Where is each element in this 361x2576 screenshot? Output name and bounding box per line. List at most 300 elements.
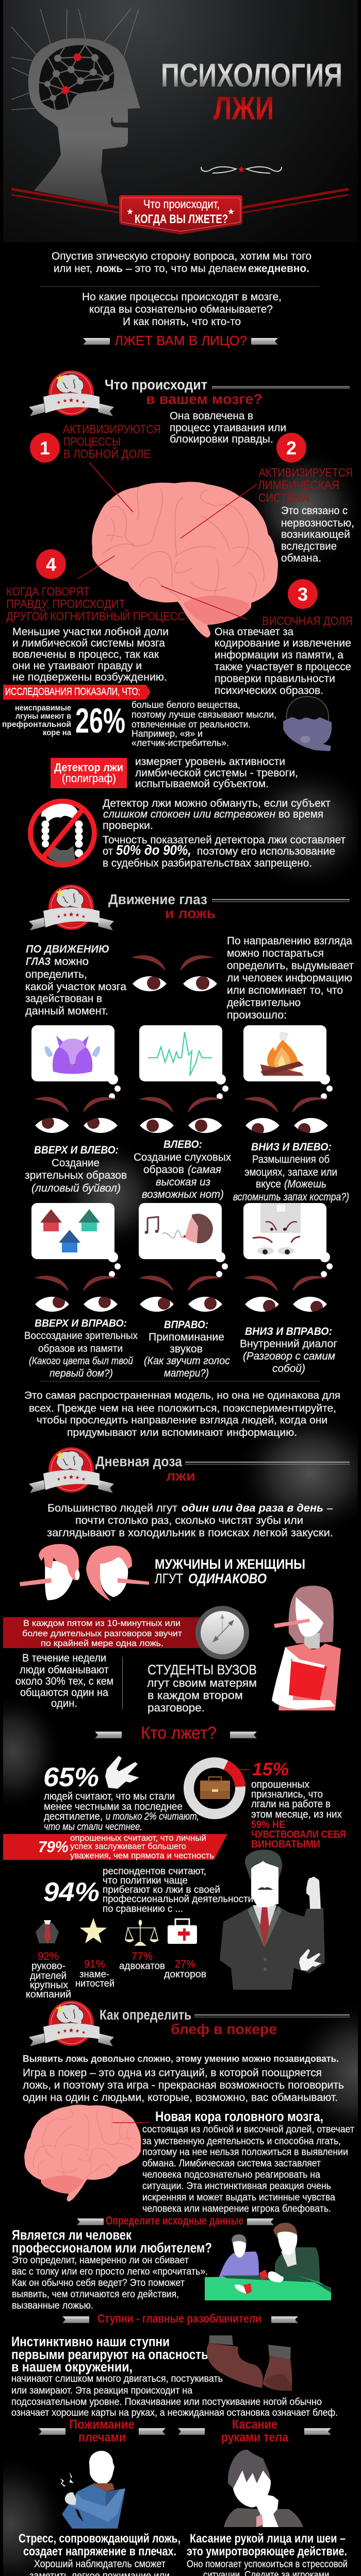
stat: 15 percent: ВИНОВАТЫМИ: [251, 1839, 320, 1850]
text: feet react first: начинают слишком много двигаться, постукивать: [11, 2374, 223, 2384]
text: shoulder stress: Хороший наблюдатель сможет: [34, 2558, 166, 2570]
polygraph box: Детектор лжи: [54, 761, 123, 774]
heading: touching body: руками тела: [221, 2430, 289, 2445]
text: deceiving the polygraph: Точность показателей детектора лжи составляет: [103, 834, 346, 846]
text: neocortex: Новая кора головного мозга,: [155, 2109, 323, 2124]
heading: feet are revealers: Ступни - главные разоблачители: [97, 2312, 261, 2325]
eyes: down right: [243, 1276, 327, 1313]
caption: down left: эмоциях, запахе или: [244, 1166, 337, 1178]
intro text: ежедневно.: [248, 263, 309, 275]
stat: 65 percent: десятилетие,: [44, 1811, 103, 1822]
text: gaze direction right: действительно: [227, 997, 301, 1009]
text: polygraph description: измеряет уровень активности: [135, 756, 285, 768]
heading: touching body: Касание: [232, 2417, 277, 2432]
stat: 15 percent: ЧУВСТВОВАЛИ СЕБЯ: [251, 1829, 346, 1840]
text: neocortex: за умственную деятельность и способна лгать,: [142, 2136, 341, 2147]
text: professional or amateur: [12, 2227, 212, 2311]
text: gaze direction right: можно постараться: [227, 947, 324, 959]
stat: 15 percent: 59% НЕ: [251, 1819, 285, 1831]
text: model note: чтобы проследить направление взгляда людей, когда они: [37, 1415, 327, 1426]
text: temporal lobe: информации из памяти, а: [215, 649, 343, 661]
caption: left: [134, 1139, 231, 1200]
text: concealing truth: Она вовлечена в: [170, 410, 253, 422]
text: calming action: [187, 2532, 348, 2576]
text: students lie to mothers: СТУДЕНТЫ ВУЗОВ: [147, 1662, 257, 1677]
label 1: ПРОЦЕССЫ: [63, 435, 121, 448]
research bar: ИССЛЕДОВАНИЯ ПОКАЗАЛИ, ЧТО:: [5, 686, 140, 698]
caption: up right: первый дом?): [50, 1368, 113, 1379]
text: majority lie daily: один или два раза в день: [182, 1502, 323, 1514]
icon: note and singing woman: [144, 1214, 213, 1243]
stats: professions: 77%: [132, 1951, 153, 1962]
stat: 15 percent: 15%: [252, 1759, 289, 1780]
text: poker intro: ложь, и поэтому эта игра - прекрасная возможность поговорить: [23, 2079, 344, 2091]
text: shoulder stress: Стресс, сопровождающий ложь,: [19, 2532, 180, 2546]
stat: 94 percent: прибегают ко лжи в своей: [103, 1885, 220, 1895]
stats: professions: 27%: [175, 1958, 195, 1970]
text: smaller areas: не подвержены возбуждению.: [12, 671, 167, 683]
marker 4: [36, 549, 66, 579]
icon: suit: [36, 1920, 59, 1944]
text: students lie to mothers: [147, 1662, 257, 1714]
icon: brain badge 1: [29, 370, 114, 416]
caption: right: [144, 1319, 230, 1379]
heading: touching body: [178, 2417, 331, 2445]
heading: eye movement: Движение глаз: [108, 891, 207, 907]
text: students lie to mothers: лгут своим матерям: [147, 1676, 257, 1689]
text: feet react first: [11, 2334, 338, 2418]
red ribbon banner: Что происходит,: [143, 197, 220, 211]
text: smaller areas: Меньшие участки лобной доли: [12, 626, 169, 638]
stat: 26 percent: [2, 700, 276, 748]
text: majority lie daily: заглядывают в холодильник в поисках легкой закуски.: [47, 1527, 333, 1539]
text: gaze direction right: ли человек информацию: [227, 972, 352, 984]
heading: shoulder shrug: Пожимание: [69, 2417, 135, 2432]
callout: lies to your face: ЛЖЕТ ВАМ В ЛИЦО?: [114, 333, 247, 348]
eyes: left: [139, 1097, 222, 1133]
text: concealing truth: [170, 410, 286, 445]
text: men and women lie equally: ЛГУТ: [155, 1571, 183, 1586]
text: model note: всех. Прежде чем на нее положиться, поэкспериментируйте,: [29, 1403, 336, 1414]
label 1: В ЛОБНОЙ ДОЛЕ: [63, 447, 151, 461]
text: smaller areas: [12, 626, 169, 683]
text: professional or amateur: вызванные ложью.: [12, 2300, 93, 2311]
text: model note: Это самая распространенная модель, но она не одинакова для: [24, 1390, 340, 1401]
caption: left: возможных нот): [142, 1189, 224, 1200]
text: gaze direction right: По направлению взгляда: [227, 935, 352, 947]
polygraph box: [51, 758, 127, 788]
text: temporal lobe: психических образов.: [215, 685, 323, 697]
ornament under title: [201, 166, 282, 173]
text: deceiving the polygraph: проверки.: [103, 820, 153, 832]
stat: 26 percent: отвлеченные от реальности.: [132, 719, 251, 730]
stats: professions: знаме-: [79, 1969, 109, 1980]
text: poker intro: один на один с людьми, которые, возможно, вас обманывают.: [23, 2092, 338, 2104]
connector lines: [78, 463, 257, 619]
stat: 65 percent: людей считают, что мы стали: [44, 1791, 175, 1802]
caption: up left: (лиловый буйвол): [31, 1182, 121, 1194]
icon: central eyes: [131, 955, 217, 991]
stat: 26 percent: префронтальной: [2, 720, 71, 729]
text: eye movement left: данный момент.: [25, 1005, 108, 1017]
stat: 94 percent: 94%: [43, 1877, 100, 1907]
intro text: ложь: [96, 263, 123, 275]
stat: 26 percent: Например, «я» и: [132, 728, 203, 739]
panel: up and left: [25, 1025, 127, 1194]
stat: 94 percent: респондентов считают,: [103, 1866, 206, 1877]
text: majority lie daily: [47, 1502, 333, 1539]
stat: 65 percent: что мы стали честнее.: [44, 1821, 142, 1833]
text: poker intro: Игра в покер – это одна из ситуаций, в которой поощряется: [23, 2067, 322, 2079]
text: nervousness: вследствие: [281, 540, 337, 552]
chart: donut 15 percent: [189, 1762, 250, 1814]
heading: shoulder shrug: плечами: [78, 2430, 126, 2445]
red ribbon banner: [11, 189, 349, 234]
heading: what happens in your brain: [105, 377, 350, 407]
icon: man touching neck: [224, 2450, 303, 2527]
text: eye movement left: какой участок мозга: [25, 981, 126, 993]
caption: up right: [24, 1318, 138, 1379]
icon: brain 2: [24, 2105, 149, 2201]
icons: professions row: [36, 1918, 197, 1945]
stats: professions: нитостей: [75, 1978, 114, 1989]
heading: what happens in your brain: в вашем мозге?: [146, 391, 262, 407]
stat: 26 percent: лгуны имеют в: [15, 712, 71, 721]
stat: 15 percent: [251, 1759, 346, 1850]
stat: 15 percent: опрошенных: [251, 1779, 309, 1790]
title: ЛЖИ: [214, 90, 274, 127]
panel: down and left: [233, 1025, 349, 1203]
intro text: [40, 250, 320, 328]
text: neocortex: ситуации. Эта инстинктивная реакция очень: [142, 2181, 331, 2192]
icon: lilac buffalo: [45, 1036, 100, 1074]
caption: down right: Внутренний диалог: [240, 1338, 337, 1350]
brain illustration: [92, 482, 278, 637]
label 4: КОГДА ГОВОРЯТ: [6, 585, 90, 598]
text: weekly deception: общаются один на: [20, 1687, 108, 1699]
caption: left: высокая из: [156, 1176, 210, 1188]
conversation bar: более длительных разговоров звучит: [22, 1629, 182, 1638]
text: concealing truth: процесс утаивания или: [170, 422, 286, 434]
icon: brain badge 2: [29, 885, 114, 930]
text: model note: [24, 1381, 340, 1438]
text: eye movement left: задействован в: [25, 993, 102, 1005]
label 4: ПРАВДУ, ПРОИСХОДИТ: [6, 597, 125, 611]
text: men and women lie equally: ОДИНАКОВО: [188, 1571, 267, 1586]
panel: left: [134, 1025, 231, 1200]
text: model note: придумывают или вспоминают информацию.: [67, 1427, 297, 1438]
text: deceiving the polygraph: от: [103, 845, 113, 857]
text: eye movement left: ПО ДВИЖЕНИЮ: [26, 943, 109, 955]
text: temporal lobe: кодирование и извлечение: [215, 637, 351, 649]
caption: up right: (Какого цвета был твой: [29, 1355, 133, 1367]
text: nervousness: обмана.: [281, 552, 321, 564]
heading: define baseline: Определите исходные данные: [106, 2214, 243, 2227]
icon: inner dialogue faces: [253, 1203, 301, 1255]
icon: prohibited polygraph: [30, 801, 94, 865]
text: nervousness: [281, 505, 354, 564]
text: gaze direction right: или вспоминает то, что: [227, 985, 343, 996]
text: shoulder stress: создает напряжение в плечах.: [23, 2545, 176, 2558]
icon: man shrugging: [60, 2451, 125, 2529]
text: deceiving the polygraph: во время: [278, 808, 323, 820]
text: neocortex: человека или намерение игрока блефовать.: [142, 2204, 331, 2214]
stat: 65 percent: менее честными за последнее: [44, 1801, 183, 1812]
marker 2: 2: [286, 437, 297, 459]
caption: right: звуков: [170, 1343, 203, 1355]
stat: 26 percent: больше белого вещества,: [132, 700, 240, 710]
intro text: – это то, что мы делаем: [126, 263, 247, 275]
caption: down right: [240, 1326, 337, 1375]
icon: pilot helmet: [283, 697, 332, 751]
text: professional or amateur: Это определит, намеренно ли он сбивает: [12, 2255, 189, 2266]
text: eye movement left: определить,: [25, 969, 87, 980]
caption: up right: Воссоздание зрительных: [24, 1330, 138, 1342]
text: weekly deception: люди обманывают: [20, 1664, 109, 1676]
text: professional or amateur: выявить, чем отличаются его действия,: [12, 2289, 179, 2300]
stat: 26 percent: поэтому лучше связывают мысли,: [132, 709, 276, 720]
caption: left: (самая: [188, 1164, 221, 1176]
text: eye movement left: ГЛАЗ: [26, 956, 51, 968]
text: feet react first: первыми реагируют на опасность: [11, 2347, 208, 2362]
caption: right: матери?): [164, 1367, 209, 1379]
text: temporal lobe: Она отвечает за: [215, 626, 293, 638]
icon: scales: [125, 1920, 158, 1945]
conversation bar: В каждом пятом из 10-минутных или: [23, 1618, 180, 1628]
icon: poker players at table: [205, 2223, 331, 2300]
text: eye movement left: можно: [54, 956, 89, 968]
text: deceiving the polygraph: Детектор лжи можно обмануть, если субъект: [103, 798, 331, 809]
icon: man and woman with long noses: [20, 1544, 149, 1601]
eyes: up left: [34, 1097, 118, 1133]
stats: professions: крупных: [30, 1980, 69, 1991]
text: poker intro: Выявить ложь довольно сложно, этому умению можно позавидовать.: [23, 2054, 339, 2064]
icon: star: [80, 1918, 107, 1943]
polygraph box: (полиграф): [62, 772, 116, 785]
stats: professions: докторов: [164, 1969, 206, 1980]
heading: shoulder shrug: [39, 2417, 166, 2445]
text: polygraph description: испытываемой субъектом.: [135, 778, 269, 790]
stat: 15 percent: этом месяце, из них: [251, 1809, 342, 1820]
caption: right: ВПРАВО:: [164, 1319, 208, 1331]
label 1: [63, 422, 161, 461]
text: neocortex: [142, 2109, 354, 2214]
caption: down left: [233, 1141, 349, 1203]
icon: brain badge 3: [29, 1447, 114, 1493]
caption: up left: Создание: [52, 1157, 100, 1169]
heading: poker bluff: [100, 2007, 350, 2037]
stat: 15 percent: лгали на работе в: [251, 1799, 331, 1810]
text: weekly deception: В течение недели: [22, 1652, 106, 1664]
heading: what happens in your brain: Что происходит: [105, 377, 207, 393]
text: nervousness: Это связано с: [281, 505, 348, 517]
panel: right: [139, 1203, 230, 1379]
caption: up left: зрительных образов: [25, 1170, 127, 1181]
stat: 65 percent: [43, 1756, 199, 1833]
marker 2: [276, 433, 306, 463]
callout: lies to your face: [83, 333, 278, 348]
icon: houses: [40, 1209, 100, 1252]
text: professional or amateur: Как он обычно себя ведет? Это поможет: [12, 2278, 185, 2289]
stat: 26 percent: «летчик-истребитель».: [132, 738, 229, 748]
icon: brain badge 4: [29, 2001, 114, 2046]
text: gaze direction right: произошло:: [227, 1009, 287, 1021]
text: deceiving the polygraph: в судебных разбирательствах запрещено.: [103, 857, 312, 869]
text: smaller areas: и лимбической системы мозга: [12, 637, 165, 649]
stat bar: 79 percent: уважения, чем прямота и честность: [70, 1851, 214, 1860]
text: deceiving the polygraph: поэтому его использование: [197, 845, 335, 857]
icon: pointing hand: [105, 1756, 139, 1789]
red ribbon banner: КОГДА ВЫ ЛЖЕТЕ?: [135, 212, 228, 226]
conversation bar: [3, 1617, 200, 1648]
intro text: И как понять, что кто-то: [123, 316, 241, 328]
icon: medical case: [168, 1919, 197, 1944]
text: concealing truth: блокировки правды.: [170, 433, 273, 445]
text: feet react first: в нашем окружении,: [11, 2359, 133, 2375]
text: smaller areas: вовлечены в процесс, так как: [12, 649, 159, 660]
intro text: или нет,: [54, 263, 92, 275]
text: majority lie daily: Большинство людей лгут: [47, 1502, 177, 1514]
heading: who lies: [95, 1723, 257, 1743]
label 4: [6, 585, 185, 623]
text: feet react first: или замирают. Эта реакция происходит на: [11, 2385, 192, 2396]
heading: eye movement: и ложь: [165, 905, 216, 921]
caption: up right: образов из памяти: [38, 1343, 123, 1354]
stat: 15 percent: признались, что: [251, 1789, 323, 1800]
heading: who lies: Кто лжет?: [141, 1723, 217, 1743]
text: polygraph description: [135, 756, 298, 790]
marker 4: 4: [46, 554, 56, 575]
icon: campfire: [260, 1031, 304, 1076]
panel: up and right: [24, 1203, 138, 1379]
stat bar: 79 percent: успех заслуживает большего: [70, 1841, 186, 1851]
caption: left: образов: [143, 1164, 184, 1176]
stat: 94 percent: [43, 1866, 253, 1914]
text: gaze direction right: [227, 935, 354, 1021]
caption: down left: Размышления об: [252, 1154, 330, 1165]
stat: 26 percent: неисправимые: [15, 704, 71, 713]
text: neocortex: обмана. Лимбическая система заставляет: [142, 2158, 321, 2169]
text: weekly deception: один.: [51, 1698, 77, 1709]
stats: professions: 91%: [84, 1958, 105, 1970]
stats: professions: адвокатов: [119, 1961, 165, 1972]
stat: 94 percent: по сравнению с ...: [103, 1904, 183, 1914]
text: students lie to mothers: в каждом втором: [147, 1689, 243, 1702]
caption: up right: ВВЕРХ И ВПРАВО:: [35, 1318, 127, 1329]
stats: professions: дителей: [30, 1971, 67, 1981]
eyes: up right: [34, 1276, 118, 1312]
icon: pulse line: [148, 1032, 212, 1076]
text: poker intro: [23, 2054, 344, 2104]
panel: brain diagram: [6, 410, 354, 697]
text: majority lie daily: –: [327, 1502, 333, 1514]
text: deceiving the polygraph: 50% до 90%,: [116, 842, 191, 858]
text: smaller areas: они не утаивают правду и: [12, 660, 142, 672]
text: men and women lie equally: [155, 1556, 305, 1586]
header: head silhouette with brain network: [11, 9, 140, 205]
marker 3: [288, 579, 318, 609]
text: temporal lobe: также участвует в процессе: [215, 661, 351, 673]
text: feet react first: Инстинктивно наши ступни: [11, 2334, 170, 2349]
text: students lie to mothers: разговоре.: [147, 1701, 205, 1714]
stat bar: 79 percent: [3, 1833, 227, 1860]
eyes: right: [139, 1276, 222, 1312]
heading: daily dose: Дневная доза: [95, 1453, 182, 1469]
text: polygraph description: лимбической системы - тревоги,: [135, 767, 298, 779]
text: gaze direction right: определить, выдумывает: [227, 960, 354, 972]
intro text: Но какие процессы происходят в мозге,: [82, 291, 282, 303]
stat: 65 percent: 65%: [43, 1762, 99, 1792]
text: temporal lobe: [215, 626, 351, 697]
icon: briefcase: [200, 1777, 230, 1799]
intro text: Опустив этическую сторону вопроса, хотим мы того: [52, 250, 311, 262]
heading: daily dose: лжи: [166, 1468, 195, 1484]
stat: 94 percent: профессиональной деятельности: [103, 1894, 253, 1905]
label 1: АКТИВИЗИРУЮТСЯ: [63, 422, 161, 436]
text: feet react first: подсознательном уровне. Покачивание или постукивание ногой обычно: [11, 2397, 322, 2408]
icon: shoes: [206, 2335, 292, 2391]
label 4: ДРУГОЙ КОГНИТИВНЫЙ ПРОЦЕСС: [6, 609, 185, 623]
text: professional or amateur: профессионалом или любителем?: [12, 2240, 212, 2256]
marker 1: 1: [40, 437, 50, 459]
text: professional or amateur: Является ли человек: [12, 2227, 132, 2243]
icon: politician: [220, 1850, 325, 1990]
caption: down right: (Разговор с самим: [243, 1350, 335, 1362]
caption: down right: ВНИЗ И ВПРАВО:: [245, 1326, 332, 1337]
text: weekly deception: [15, 1652, 123, 1709]
stats: professions: компаний: [26, 1989, 71, 2000]
caption: up left: ВВЕРХ И ВЛЕВО:: [34, 1144, 119, 1156]
eyes: down left: [243, 1097, 328, 1136]
conversation bar: по крайней мере одна ложь.: [41, 1638, 163, 1648]
icon: student girl with long nose: [272, 1586, 341, 1710]
stats: professions: 92%: [38, 1951, 59, 1962]
caption: right: (Как звучит голос: [144, 1355, 230, 1367]
text: feet react first: означает хорошие карты на руках, а неожиданная остановка означает блеф.: [11, 2408, 338, 2418]
stat: 94 percent: что политики чаще: [103, 1875, 188, 1886]
label 2: ЛИМБИЧЕСКАЯ: [258, 478, 339, 492]
text: neocortex: искренняя и может выдать истинные чувства: [142, 2192, 335, 2203]
text: weekly deception: около 30% тех, с кем: [15, 1675, 113, 1687]
caption: up left: [25, 1144, 127, 1194]
panel: down and right: [240, 1203, 337, 1375]
research bar: [3, 685, 151, 700]
text: majority lie daily: почти столько раз, сколько чистят зубы или: [75, 1515, 303, 1527]
text: deceiving the polygraph: [103, 798, 346, 869]
caption: left: Создание слуховых: [134, 1151, 231, 1163]
stat: 26 percent: 26%: [75, 701, 125, 740]
label 2: СИСТЕМА: [258, 491, 310, 504]
text: men and women lie equally: МУЖЧИНЫ И ЖЕНЩИНЫ: [155, 1556, 305, 1572]
caption: right: Припоминание: [149, 1331, 224, 1343]
text: nervousness: возникающей: [281, 529, 350, 540]
heading: poker bluff: блеф в покере: [171, 2021, 277, 2037]
caption: down right: собой): [272, 1363, 305, 1375]
text: eye movement left: [25, 943, 126, 1017]
text: professional or amateur: вас с толку или его просто легко «прочитать».: [12, 2266, 208, 2277]
text: neocortex: человека подсознательно реагировать на: [142, 2170, 320, 2180]
caption: down left: ВНИЗ И ВЛЕВО:: [251, 1141, 332, 1153]
text: deceiving the polygraph: слишком спокоен или встревожен: [103, 808, 275, 820]
stats: professions: руково-: [31, 1961, 65, 1972]
text: shoulder stress: [19, 2532, 180, 2576]
text: neocortex: поэтому на нее нельзя положиться в выявлении: [142, 2147, 348, 2158]
stat: 26 percent: коре на: [43, 728, 71, 737]
marker 1: [30, 433, 60, 463]
caption: down left: вкусе: [256, 1178, 281, 1190]
stat: 65 percent: и только 2% считают,: [106, 1811, 199, 1822]
heading: daily dose: [95, 1453, 350, 1484]
